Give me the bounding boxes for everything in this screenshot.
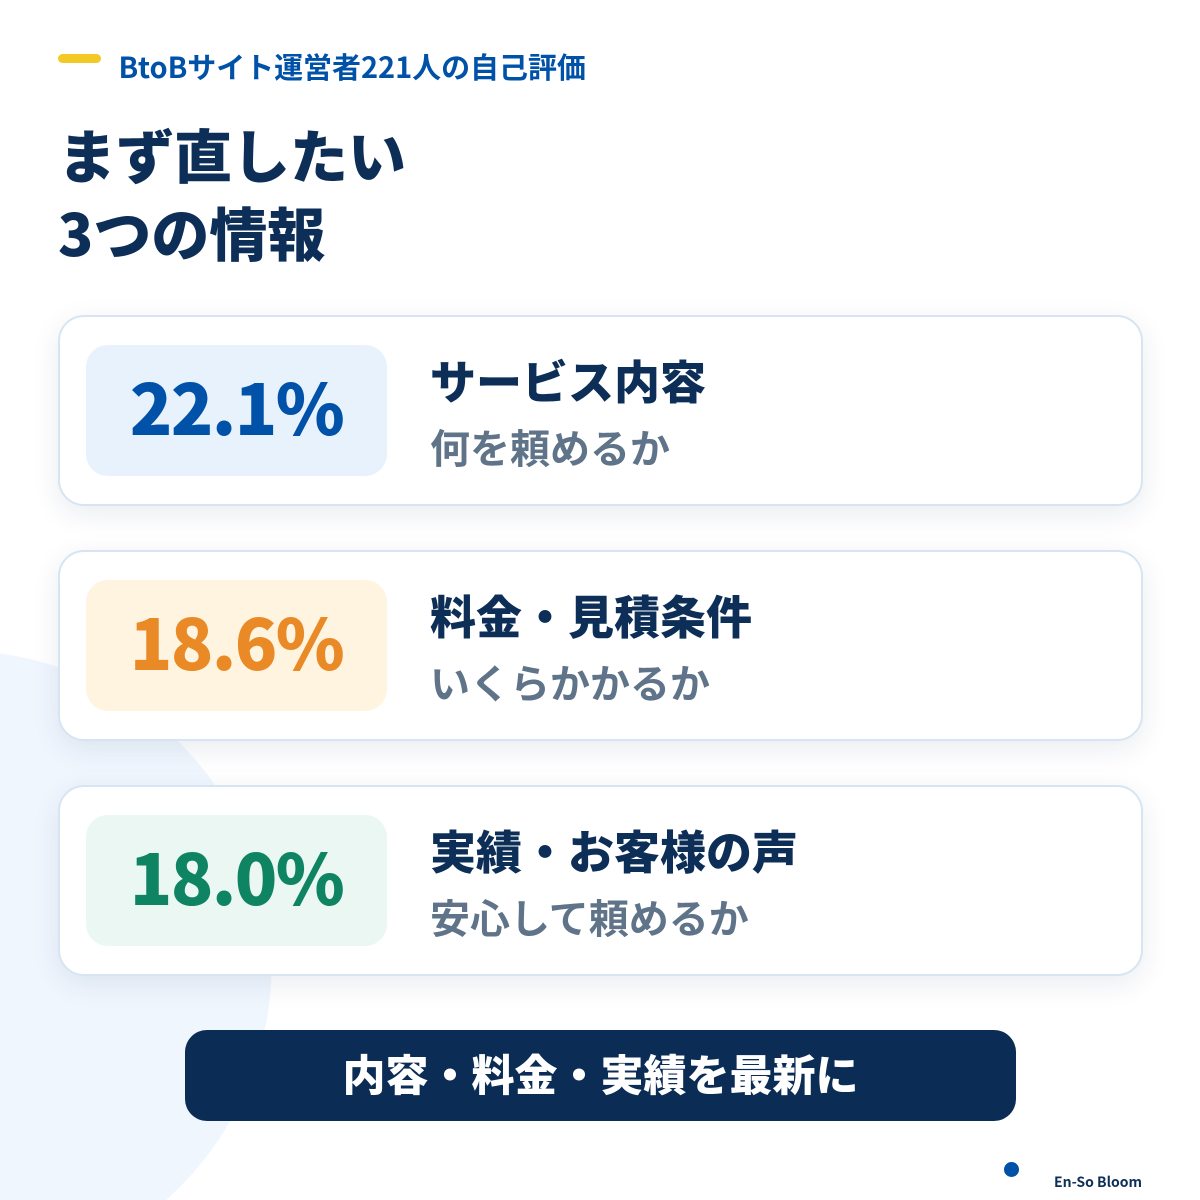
heading: track record: 実績・お客様の声: [430, 817, 798, 883]
subtext: how much it costs: いくらかかるか: [430, 652, 710, 710]
accent bar: [58, 54, 101, 63]
title: [58, 111, 406, 273]
stat: 18.6%: [86, 580, 387, 711]
call to action banner: [185, 1030, 1016, 1121]
panel: track record: [58, 785, 1143, 976]
subtext: reassurance: 安心して頼めるか: [430, 887, 749, 945]
title: 3つの情報: [58, 189, 325, 273]
panel: service content: [58, 315, 1143, 506]
title: まず直したい: [58, 111, 406, 195]
logo dot: [1004, 1162, 1019, 1177]
panel: pricing: [58, 550, 1143, 741]
background circle: [0, 640, 280, 1200]
call to action banner: 内容・料金・実績を最新に: [342, 1042, 858, 1104]
brand name: En-So Bloom: [1054, 1172, 1142, 1192]
stat: 22.1%: [86, 345, 387, 476]
stat: 18.6%: 18.6%: [130, 590, 343, 691]
heading: pricing: 料金・見積条件: [430, 582, 752, 648]
eyebrow text: BtoBサイト運営者221人の自己評価: [118, 45, 586, 87]
subtext: what can be ordered: 何を頼めるか: [430, 417, 670, 475]
heading: service content: サービス内容: [430, 347, 706, 413]
stat: 22.1%: 22.1%: [130, 355, 343, 456]
stat: 18.0%: [86, 815, 387, 946]
stat: 18.0%: 18.0%: [130, 825, 343, 926]
